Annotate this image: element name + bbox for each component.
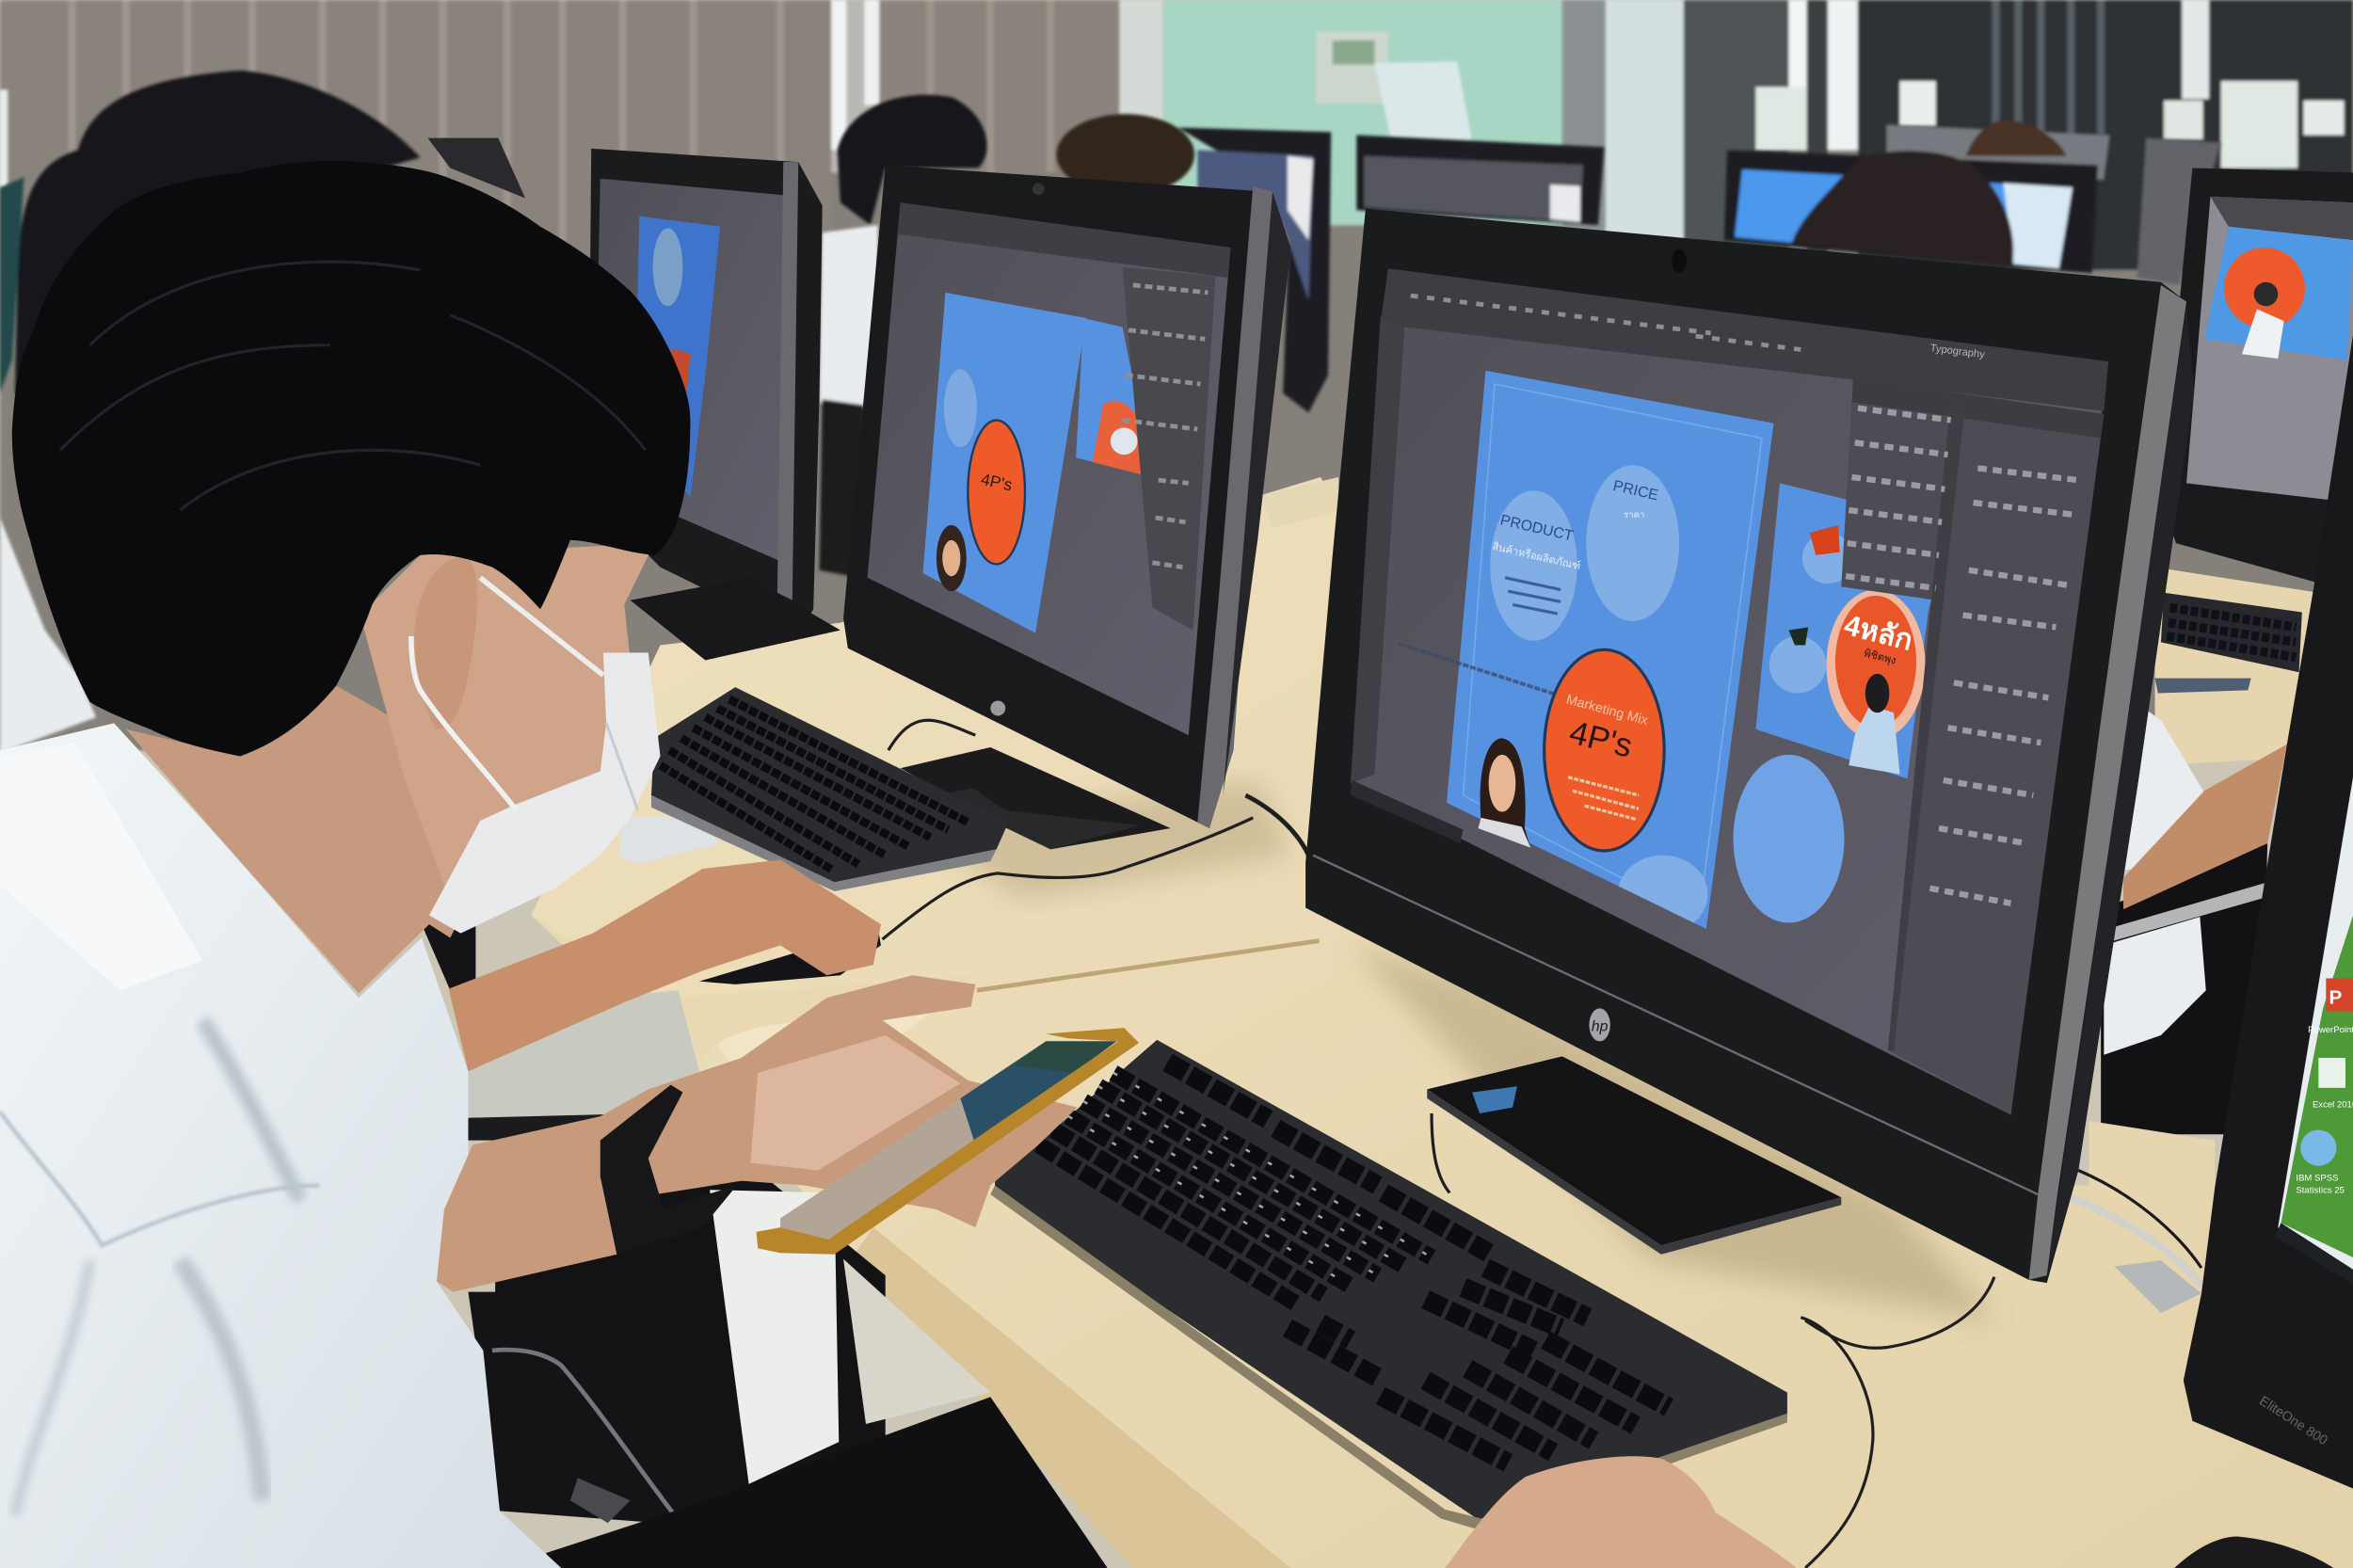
left tools strip <box>1351 315 1404 783</box>
circle: price: ราคา <box>1624 510 1644 520</box>
numeric keypad <box>1381 1340 1669 1463</box>
desk front side face <box>851 1227 1290 1568</box>
student: wrist watch <box>600 1085 737 1255</box>
hand at bottom right <box>1445 1456 1796 1568</box>
paper notes on monitors <box>1374 61 2344 216</box>
circle: product: สินค้าหรือผลิตภัณฑ์ <box>1491 540 1581 572</box>
circle: product <box>1490 490 1581 641</box>
right back monitor <box>2161 168 2353 593</box>
stray text line <box>1399 644 1593 707</box>
silver side band <box>2029 285 2186 1280</box>
desktop icons: Statistics 25 <box>2296 1185 2345 1195</box>
centre artboard with marketing mix <box>923 293 1152 633</box>
chin line <box>1313 856 2038 1194</box>
stand: centre monitor <box>901 747 1171 849</box>
student: neck and face <box>126 543 654 993</box>
windows taskbar <box>1351 780 1464 843</box>
left back student <box>0 71 420 753</box>
centre artboard with marketing mix: 4P's <box>979 470 1015 494</box>
student: face mask <box>411 578 661 934</box>
hp logo: hp <box>1592 1018 1609 1034</box>
top toolbar <box>1381 268 2108 411</box>
webcam <box>1672 249 1687 273</box>
monitor: main <box>1305 209 2194 1283</box>
student: smartphone <box>757 1028 1139 1255</box>
properties panels <box>1841 378 2104 1115</box>
circle: price <box>1586 465 1679 621</box>
phone lying on desk <box>618 815 720 864</box>
keyboard: centre <box>651 687 1008 891</box>
mouse bottom right <box>2174 1537 2333 1568</box>
circle: marketing mix 4P's <box>1545 649 1664 851</box>
student far right arm and shirt <box>2089 697 2287 1215</box>
desks <box>531 477 2353 1568</box>
woman portrait <box>1478 738 1530 848</box>
function keys <box>1167 1063 1489 1253</box>
second artboard: 4 หลัก: 4หลัก <box>1841 610 1916 657</box>
clipped lower circle <box>1619 855 1707 922</box>
vent strip <box>2047 308 2194 1275</box>
circle: marketing mix 4P's: Marketing Mix <box>1564 693 1650 728</box>
workspace label: Typography <box>1929 343 1986 360</box>
main artboard <box>1399 371 1774 934</box>
trousers of student <box>546 1397 1108 1568</box>
student in back row with tied hair <box>1792 151 2013 265</box>
student: forearm and hand <box>437 975 1078 1292</box>
background wall and curtains <box>0 0 2353 750</box>
keyboard: main <box>990 1040 1787 1530</box>
circle: price: PRICE <box>1611 478 1659 504</box>
monitor: bottom right: EliteOne 800 <box>2256 1394 2330 1448</box>
student: hair <box>12 161 690 757</box>
floor and table leg <box>422 919 990 1500</box>
monitor: back left <box>427 138 840 660</box>
student: shirt <box>0 723 561 1568</box>
arrow keys <box>1288 1323 1378 1378</box>
monitor: bottom right <box>2184 335 2353 1489</box>
chair <box>468 1292 734 1525</box>
second artboard: 4 หลัก: พิชิตพุง <box>1863 648 1897 666</box>
desktop wallpaper <box>2278 777 2353 1274</box>
ear <box>414 557 477 729</box>
monitor: centre <box>843 165 1290 828</box>
cable grommet and white cable <box>2071 1171 2201 1313</box>
right desk and keyboard <box>2155 568 2318 765</box>
hp logo <box>1589 1008 1610 1041</box>
desktop icons: P <box>2329 987 2342 1009</box>
desk seam <box>977 941 1319 990</box>
desktop icons: IBM SPSS <box>2296 1174 2339 1184</box>
monitor shadow on desk <box>1351 945 1996 1320</box>
wall thermostat <box>1316 31 1388 104</box>
circle: product: PRODUCT <box>1498 512 1575 545</box>
other student hand on mouse <box>449 860 881 1071</box>
cables <box>883 720 1994 1568</box>
key legends <box>1068 1073 1432 1286</box>
circle: lower canvas <box>1734 755 1845 922</box>
back row of monitors and people <box>820 95 2221 578</box>
curved desk ends <box>531 915 975 1067</box>
second artboard: 4 หลัก <box>1755 483 1951 778</box>
stand: main monitor <box>1427 1056 1841 1255</box>
main key block <box>1038 1073 1432 1304</box>
navigation cluster <box>1426 1268 1588 1351</box>
desktop icons <box>2296 978 2353 1195</box>
circle: marketing mix 4P's: 4P's <box>1566 714 1636 765</box>
